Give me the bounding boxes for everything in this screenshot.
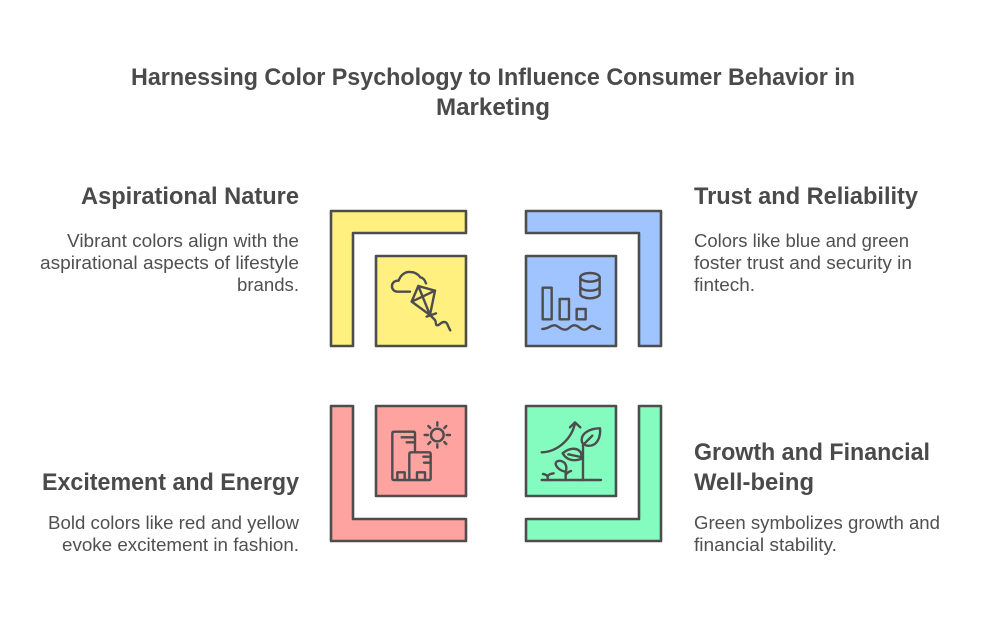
icon: buildings and sun [392,422,450,480]
title: Harnessing Color Psychology to Influence Consumer Behavior in [131,64,855,91]
heading: growth and financial well-being: Well-being [694,469,814,496]
text block: aspirational nature: brands. [237,275,299,295]
green corner bracket [526,406,661,541]
heading: aspirational nature: Aspirational Nature [81,183,299,210]
text block: excitement and energy [48,513,300,555]
heading: growth and financial well-being [694,439,930,496]
blue corner bracket [526,211,661,346]
red corner bracket [331,406,466,541]
panel: green quadrant [526,406,661,541]
panel: trust and reliability text [694,183,919,295]
text block: trust and reliability: foster trust and security in [694,253,912,273]
icon: bar chart and database [542,273,600,330]
heading: trust and reliability: Trust and Reliability [694,183,919,210]
title: Marketing [436,94,550,121]
heading: excitement and energy: Excitement and Energy [42,469,300,496]
title [131,64,855,121]
text block: trust and reliability: Colors like blue and green [694,231,909,251]
panel: blue quadrant [526,211,661,346]
panel: red quadrant [331,406,466,541]
blue square [526,256,616,346]
text block: growth and financial well-being: financial stability. [694,535,837,555]
text block: aspirational nature: aspirational aspects of lifestyle [40,253,299,273]
text block: aspirational nature: Vibrant colors align with the [67,231,299,251]
text block: growth and financial well-being [694,513,940,555]
icon: kite and cloud [392,272,450,330]
panel: growth and financial well-being text [694,439,940,555]
icon: growing plants and arrow [542,422,601,480]
yellow corner bracket [331,211,466,346]
text block: trust and reliability [694,231,912,295]
text block: excitement and energy: Bold colors like red and yellow [48,513,300,533]
text block: excitement and energy: evoke excitement in fashion. [62,535,299,555]
panel: yellow quadrant [331,211,466,346]
yellow square [376,256,466,346]
panel: excitement and energy text [42,469,300,555]
text block: growth and financial well-being: Green symbolizes growth and [694,513,940,533]
red square [376,406,466,496]
panel: aspirational nature text [40,183,299,295]
heading: growth and financial well-being: Growth and Financial [694,439,930,466]
green square [526,406,616,496]
text block: aspirational nature [40,231,299,295]
text block: trust and reliability: fintech. [694,275,755,295]
